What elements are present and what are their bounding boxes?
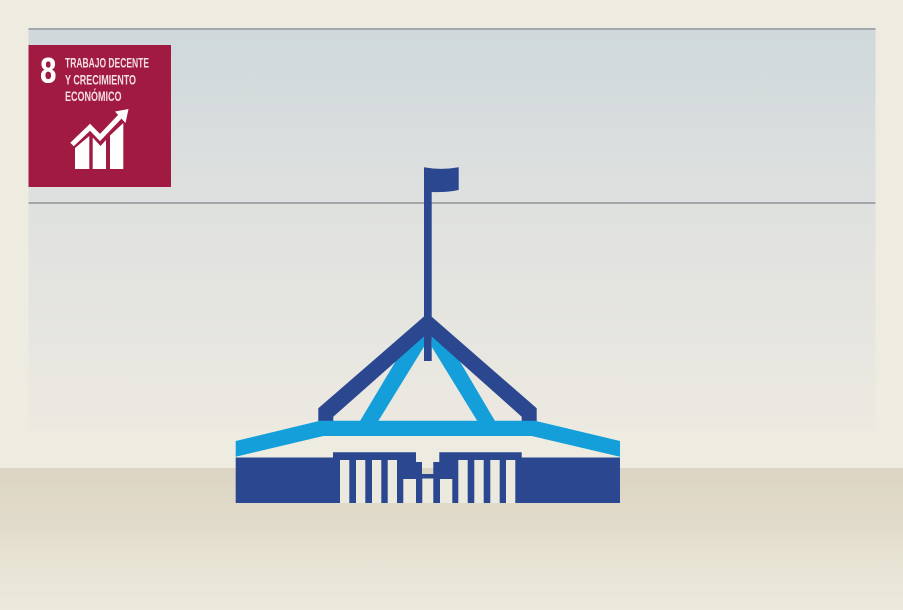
badge number: 8 (40, 52, 56, 91)
flag and pole (424, 167, 459, 361)
light blue roof (236, 421, 620, 457)
SDG 8 badge (28, 45, 171, 187)
light blue struts (360, 334, 495, 421)
ground band (0, 468, 903, 610)
icon: rising chart with arrow (72, 109, 128, 169)
badge title: TRABAJO DECENTE (65, 55, 149, 71)
dark blue rafters (318, 313, 537, 421)
badge title (65, 55, 149, 104)
parliament house illustration (236, 167, 620, 503)
sky panel (28, 28, 876, 430)
building base (236, 452, 620, 503)
badge title: ECONÓMICO (65, 87, 122, 104)
building windows (340, 460, 515, 503)
badge title: Y CRECIMIENTO (65, 71, 136, 87)
